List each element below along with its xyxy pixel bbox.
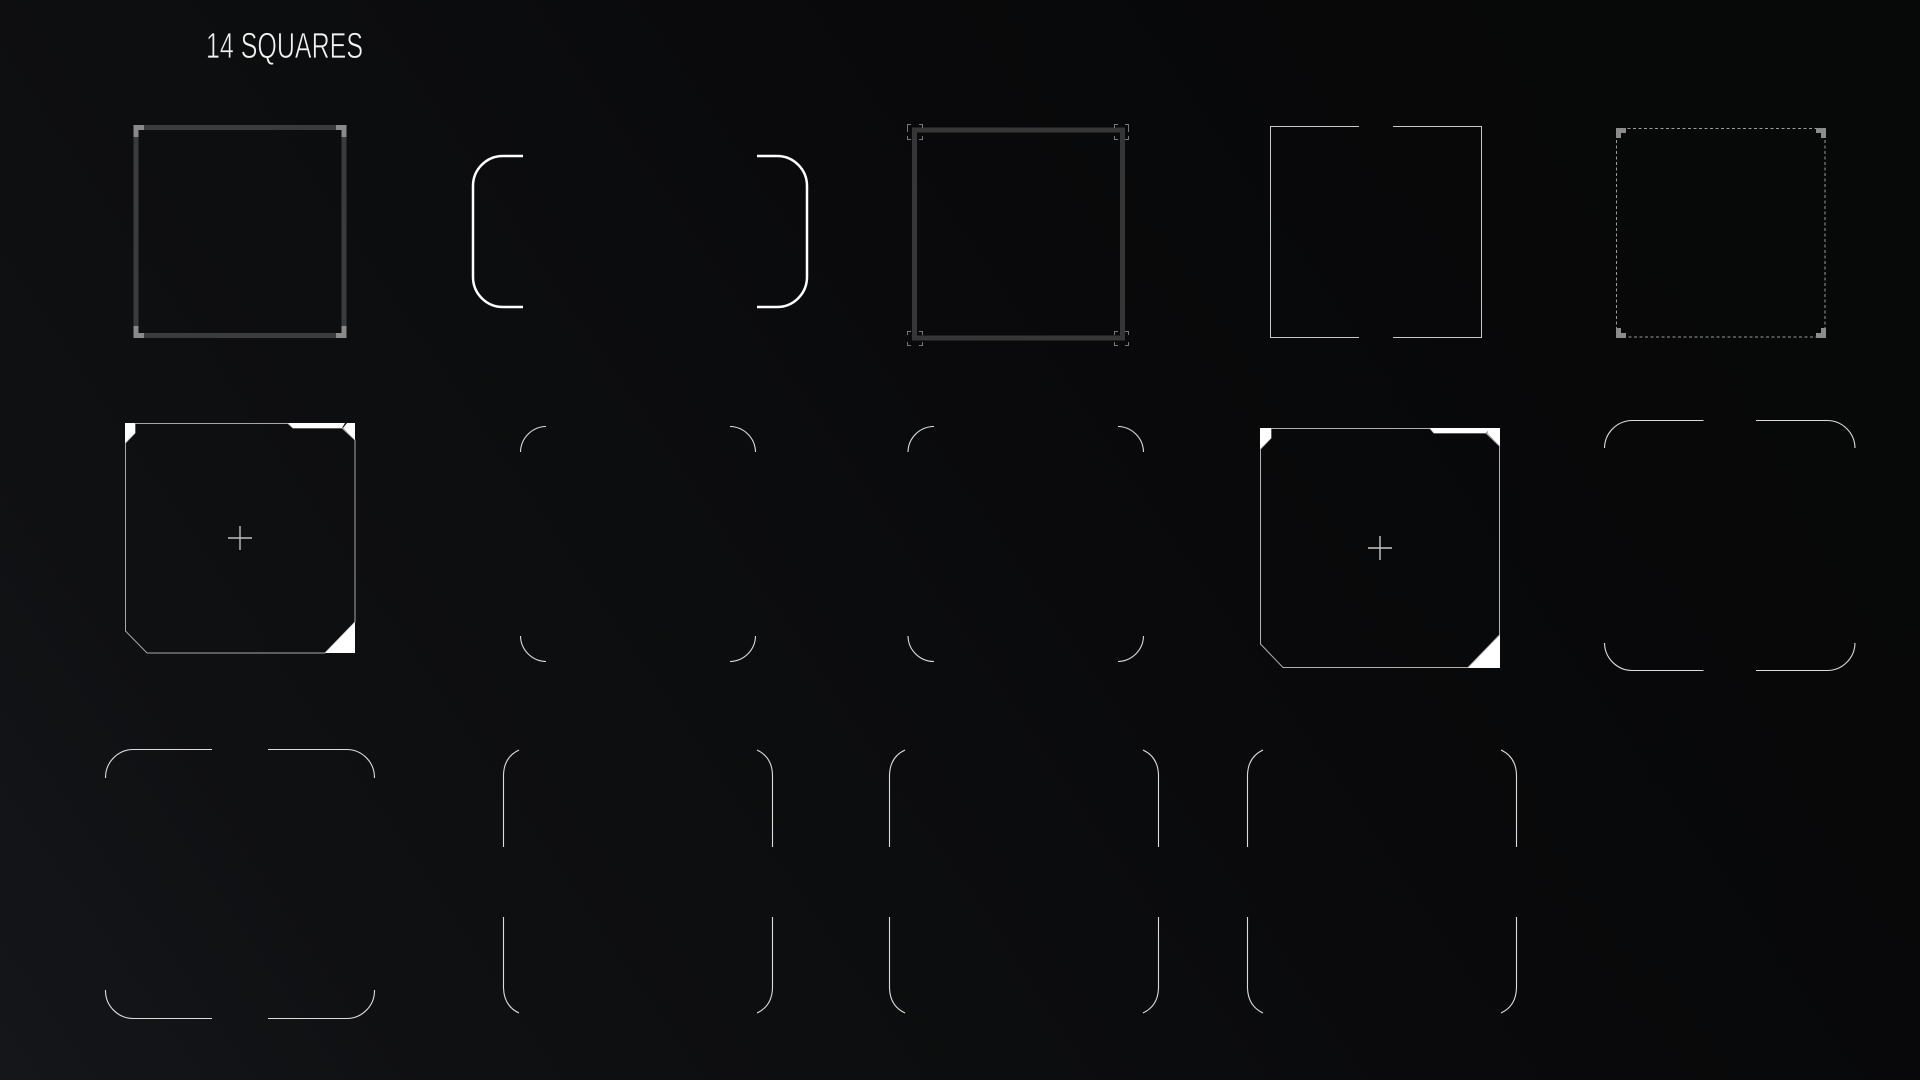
square 4: thin frame with gaps top and bottom [1270, 126, 1482, 338]
square 9: chamfered HUD frame with white corners and crosshair [1260, 428, 1500, 668]
square 6: chamfered HUD frame with white corners and crosshair [125, 423, 355, 653]
square 3: thick frame with dashed corner marks [908, 124, 1128, 346]
square 12: curved side brackets with gaps [504, 750, 772, 1013]
square 7: rounded corner arcs [520, 426, 756, 662]
square 1: thick grey frame with corner accents [136, 128, 344, 336]
title: 14 SQUARES [206, 25, 363, 66]
square 13: curved side brackets with gaps [890, 750, 1158, 1013]
square 10: rounded frame with top and bottom gaps [1604, 420, 1855, 670]
square 5: dotted frame with corner accents [1616, 128, 1826, 338]
square 8: rounded corner arcs [908, 426, 1144, 662]
square 2: white rounded brackets [473, 156, 807, 307]
square 11: rounded frame with top and bottom gaps [105, 749, 375, 1019]
square 14: curved side brackets with gaps [1248, 750, 1516, 1013]
